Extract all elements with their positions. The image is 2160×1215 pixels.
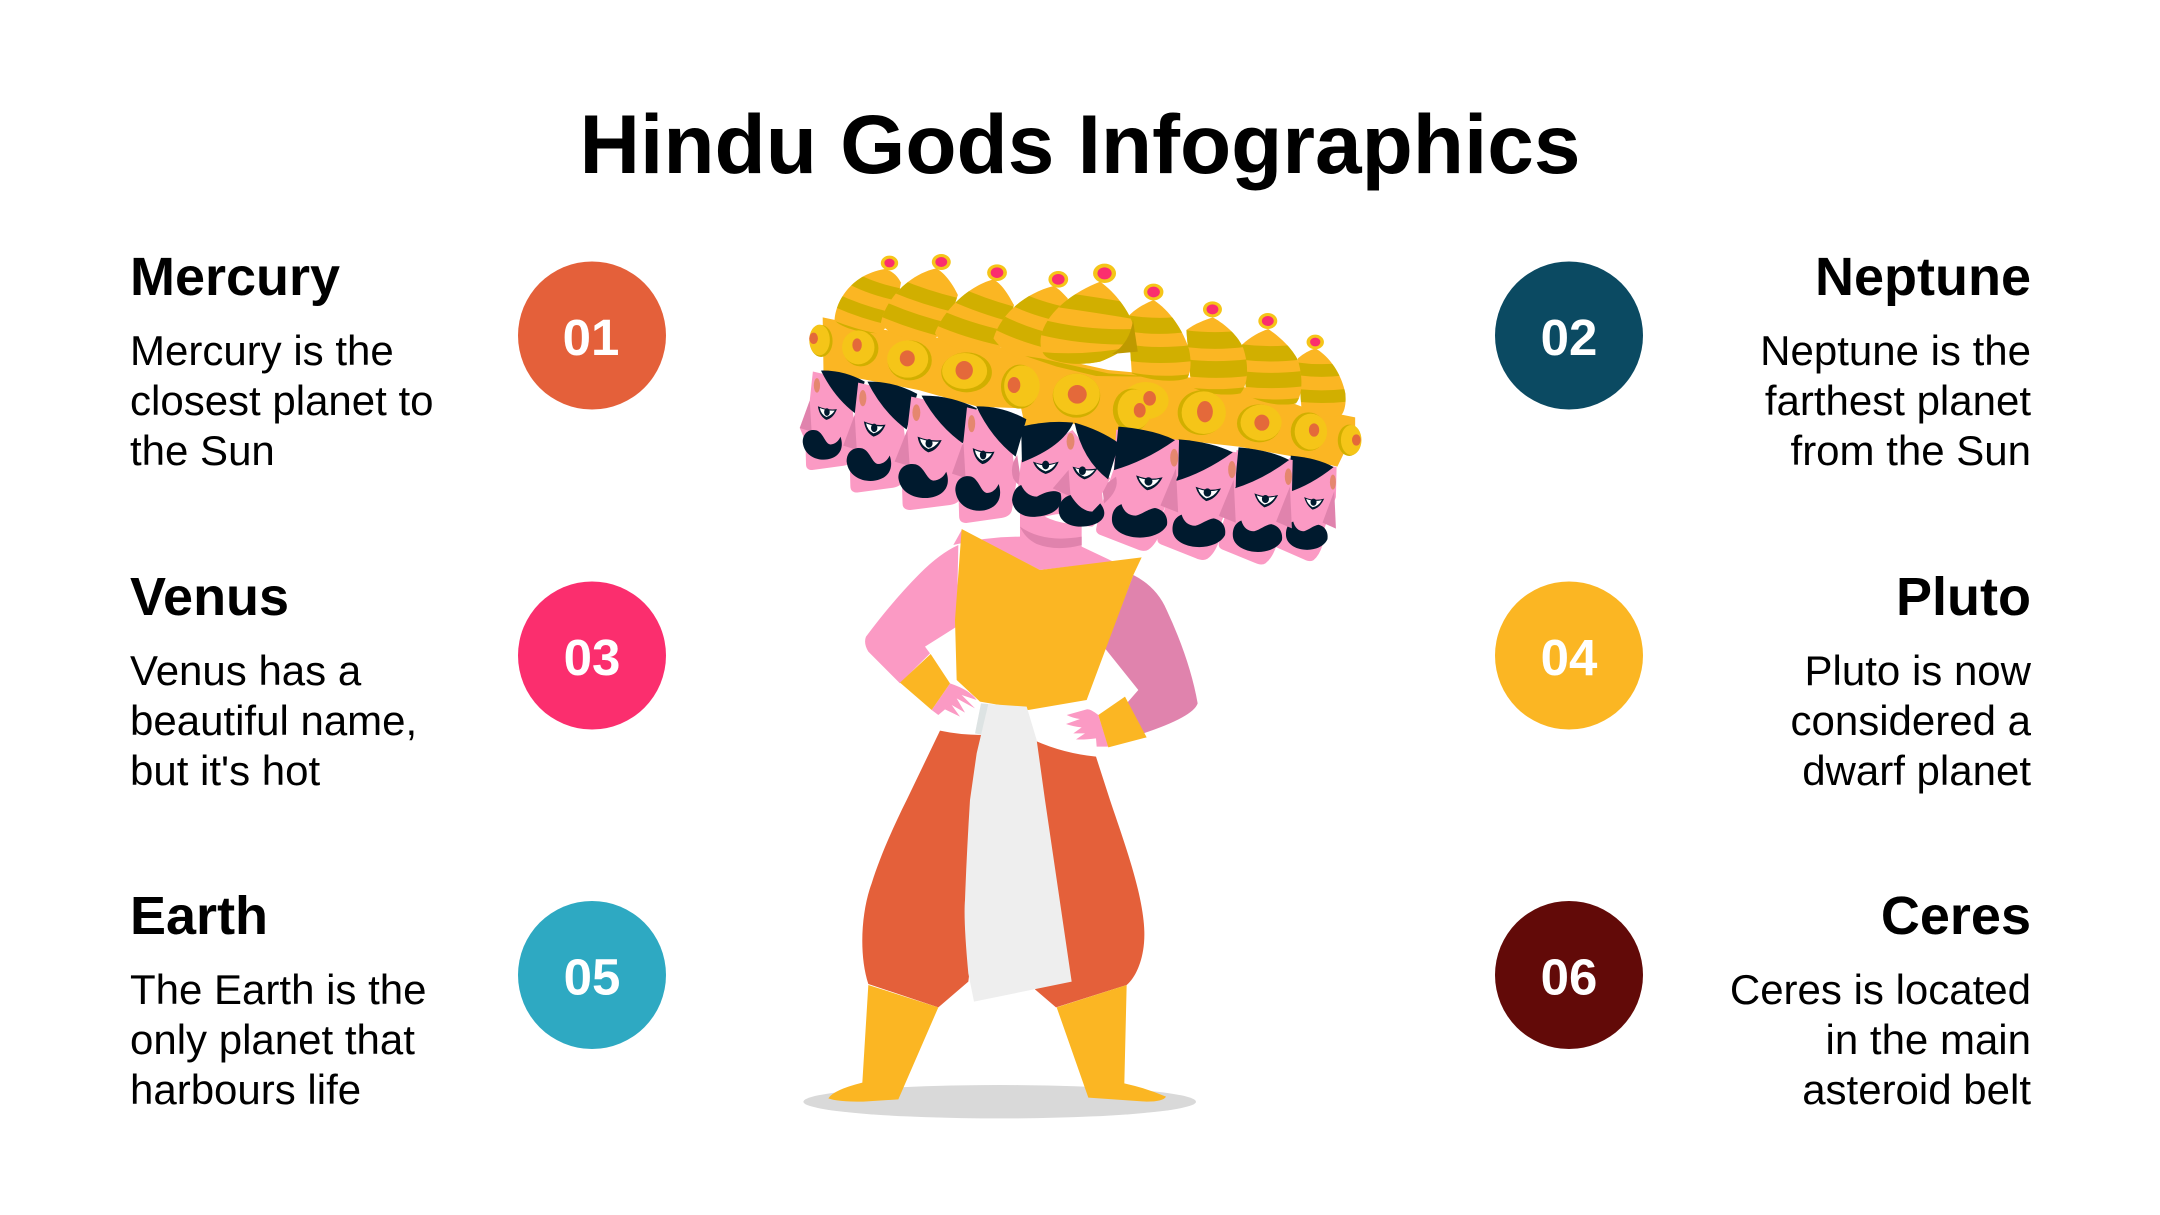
right trouser leg [1030,741,1144,1007]
left trouser leg [862,731,982,1007]
right boot [1057,985,1166,1102]
badge 04: 04 [1541,629,1598,686]
illustration: many-headed figure [800,254,1361,1118]
sash drape [965,704,1072,1002]
badge 01 [518,262,666,410]
sash edge [975,703,988,735]
badge 03: 03 [564,629,620,686]
far cuff [1098,697,1147,747]
badge 01: 01 [563,309,619,366]
badge 05 [518,901,666,1049]
item 02: Neptune text: from the Sun [1791,427,2031,474]
crown medallions [809,325,1361,456]
item 06: Ceres text: in the main [1826,1016,2031,1063]
near cuff [900,654,950,710]
item 05: Earth text: only planet that [130,1016,415,1063]
badge 06 [1495,901,1643,1049]
centre head [1012,422,1119,527]
far hand [1066,709,1108,747]
body [828,513,1198,1102]
item 03: Venus text: but it's hot [130,747,320,794]
near arm [865,545,958,683]
ground shadow [803,1085,1196,1118]
item 02: Neptune text: Neptune [1815,247,2031,307]
item 04: Pluto text: Pluto is now [1805,647,2032,694]
item 06: Ceres text [1730,886,2031,1113]
item 06: Ceres text: asteroid belt [1802,1066,2031,1113]
item 02: Neptune text: Neptune is the [1760,327,2031,374]
item 03: Venus text: Venus [130,567,289,627]
chest and neck [953,513,1113,570]
item 03: Venus text: beautiful name, [130,697,417,744]
near hand [932,683,977,717]
item 06: Ceres text: Ceres is located [1730,966,2031,1013]
vest [955,529,1142,710]
shadow under centre crown [1025,356,1144,377]
item 05: Earth text [130,886,426,1113]
badge 02: 02 [1541,309,1597,366]
badge 04 [1495,582,1643,730]
neck shadow [1020,527,1082,548]
item 01: Mercury text [130,247,434,474]
title: Hindu Gods Infographics [580,97,1580,191]
item 01: Mercury text: Mercury is the [130,327,394,374]
item 04: Pluto text: dwarf planet [1802,747,2031,794]
crown pins [881,254,1324,349]
item 02: Neptune text [1760,247,2031,474]
item 04: Pluto text: Pluto [1896,567,2031,627]
item 04: Pluto text: considered a [1790,697,2032,744]
badge 03 [518,582,666,730]
centre crown dome [1041,282,1134,364]
item 03: Venus text: Venus has a [130,647,362,694]
far-left heads [800,371,1026,523]
item 02: Neptune text: farthest planet [1765,377,2031,424]
crown domes, left [827,268,1071,362]
item 01: Mercury text: closest planet to [130,377,434,424]
crown domes, right [1128,300,1349,417]
far-right heads [1096,427,1337,565]
item 05: Earth text: The Earth is the [130,966,426,1013]
badge 02 [1495,262,1643,410]
left boot [828,985,938,1102]
heads and crowns [800,254,1361,565]
badge 06: 06 [1541,948,1597,1006]
item 06: Ceres text: Ceres [1881,886,2031,946]
crown band [823,317,1355,467]
badge 05: 05 [564,948,620,1006]
item 04: Pluto text [1790,567,2032,794]
item 05: Earth text: harbours life [130,1066,361,1113]
item 01: Mercury text: Mercury [130,247,340,307]
item 03: Venus text [130,567,417,794]
far arm [1105,575,1198,733]
item 05: Earth text: Earth [130,886,268,946]
item 01: Mercury text: the Sun [130,427,275,474]
